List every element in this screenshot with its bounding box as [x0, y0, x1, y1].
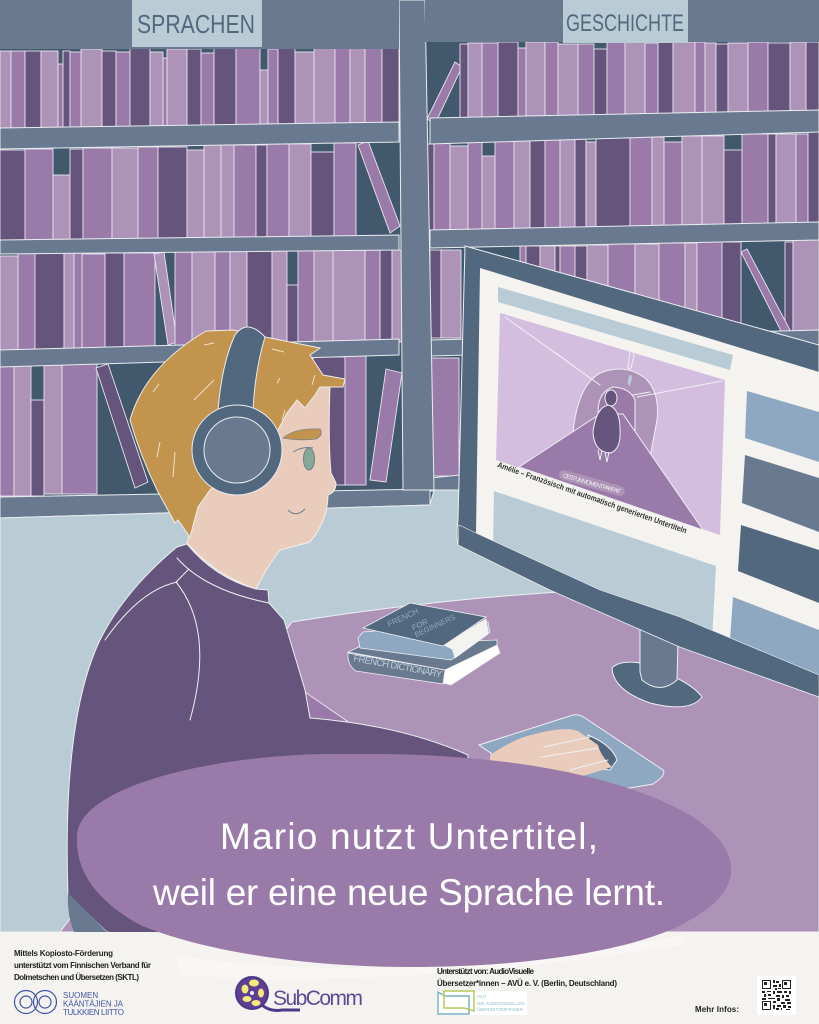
books row 1 right: [427, 42, 819, 124]
books: left shelves: [0, 45, 402, 496]
mouth: [288, 509, 305, 514]
lower monitor edge: [458, 525, 819, 697]
logo: AVÜ: DIE AUDIOVISUELLEN: [477, 1001, 525, 1006]
top book: French for beginners: [363, 603, 488, 650]
face and neck: [187, 385, 336, 589]
speech bubble: [77, 754, 731, 967]
top book: French for beginners: FOR: [410, 617, 430, 632]
sweater lines: [105, 558, 269, 720]
label: Geschichte: [563, 0, 688, 43]
bubble halo: [175, 935, 685, 979]
logo: SKTL: SUOMEN: [63, 991, 98, 1000]
bookshelf background: [0, 0, 819, 520]
burned-in subtitle: [558, 469, 626, 497]
hand and mouse: [490, 729, 617, 780]
stack of books: [348, 603, 500, 685]
supporter text: [437, 967, 617, 988]
logo: SKTL: [14, 990, 124, 1017]
chair: [68, 893, 107, 932]
figure in tunnel: [593, 390, 620, 462]
sidebar blocks: [730, 391, 819, 680]
label: Geschichte: GESCHICHTE: [566, 10, 684, 37]
books row 2 right: [427, 132, 819, 234]
books row 4 left: [0, 355, 402, 496]
bottom book: French dictionary: [348, 640, 500, 685]
books row 1 left: [0, 45, 399, 131]
book row 4 right: [431, 358, 459, 476]
logo: SKTL: TULKKIEN LIITTO: [63, 1008, 124, 1017]
bottom book: French dictionary: FRENCH DICTIONARY: [352, 653, 444, 680]
hair: [130, 330, 345, 537]
logo: AVÜ: ÜBERSETZER*INNEN: [477, 1006, 523, 1012]
burned-in subtitle: C'EST UN MOMENT PARFAIT: [562, 473, 622, 496]
eyebrow: [283, 429, 321, 440]
logo: AVÜ: [437, 991, 527, 1015]
logo: SubComm: [236, 977, 363, 1010]
screen: [476, 268, 819, 675]
books row 2 left: [0, 141, 400, 242]
eye: [293, 448, 314, 470]
headphones: [192, 327, 282, 495]
top book: French for beginners: FRENCH: [386, 607, 420, 629]
footer: [0, 932, 819, 1024]
wall: [0, 490, 819, 932]
funding text: Dolmetschen und Übersetzen (SKTL): [14, 973, 139, 982]
monitor frame: [457, 246, 819, 697]
middle book: [358, 622, 490, 660]
speech bubble: weil er eine neue Sprache lernt.: [152, 872, 665, 913]
bubble text: Mario nutzt Untertitel,: [220, 816, 598, 857]
mouse pad: [479, 715, 664, 800]
funding text: [14, 949, 151, 982]
logo: AVÜ: AVÜ: [477, 993, 486, 999]
top bar: [498, 287, 733, 370]
funding text: unterstützt vom Finnischen Verband für: [14, 961, 151, 970]
desk: [60, 592, 819, 932]
sweater: [67, 544, 468, 960]
books row 3 right: [430, 240, 819, 338]
funding text: Mittels Kopiosto-Förderung: [14, 949, 113, 958]
header beam: [0, 0, 819, 49]
wedge beside arm: [305, 692, 357, 728]
lower content block: [493, 491, 716, 640]
label: Sprachen: [132, 0, 262, 47]
books row 3 left: [0, 250, 402, 351]
supporter text: Unterstützt von: AudioVisuelle: [437, 967, 535, 976]
video still: [496, 313, 725, 535]
logo: SKTL: KÄÄNTÄJIEN JA: [63, 1000, 124, 1008]
books: right shelves: [427, 42, 819, 476]
logo: SubComm: SubComm: [273, 987, 363, 1010]
caption: Amélie – Französisch mit automatisch generierten Untertiteln: [496, 460, 688, 535]
person: [67, 327, 468, 960]
top book: French for beginners: BEGINNERS: [413, 612, 457, 639]
supporter text: Übersetzer*innen – AVÜ e. V. (Berlin, Deutschland): [437, 979, 617, 988]
label: Sprachen: SPRACHEN: [137, 9, 255, 39]
shelves: [0, 0, 819, 518]
monitor: [457, 246, 819, 707]
monitor stand: [612, 625, 702, 707]
more info label: Mehr Infos:: [695, 1005, 739, 1014]
QR code: [757, 976, 796, 1015]
hair highlights: [153, 343, 315, 477]
